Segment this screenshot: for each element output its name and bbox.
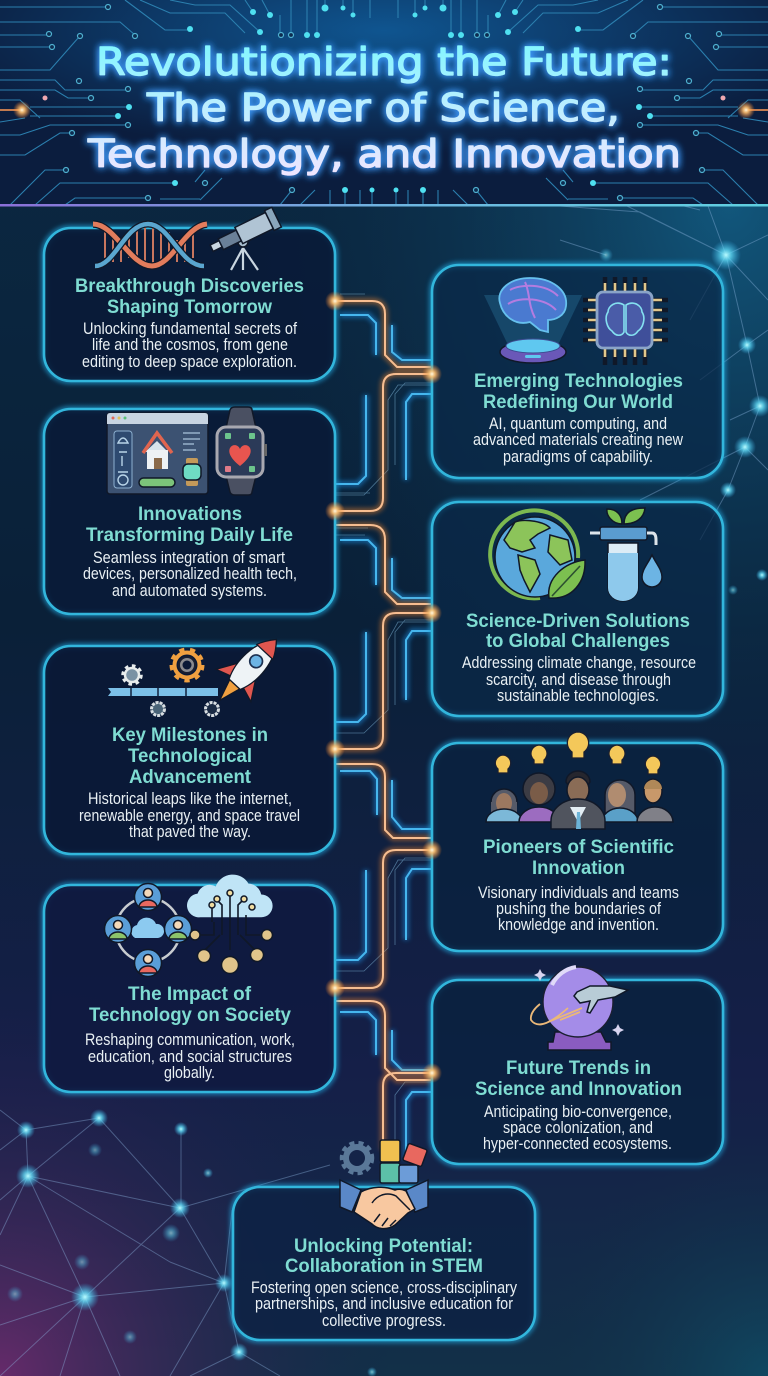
icon: telescope bbox=[207, 207, 281, 270]
panel: key milestones bbox=[44, 623, 335, 854]
body text: devices, personalized health tech, bbox=[83, 564, 297, 583]
heading: Innovation bbox=[532, 857, 625, 879]
heading bbox=[483, 836, 674, 879]
neural network: upper right bbox=[560, 205, 768, 595]
heading bbox=[86, 503, 293, 546]
heading bbox=[475, 1057, 682, 1100]
body text: Unlocking fundamental secrets of bbox=[83, 319, 297, 338]
panel: daily life innovations bbox=[44, 407, 335, 614]
icon: gear and puzzle bbox=[342, 1140, 427, 1183]
heading: Collaboration in STEM bbox=[285, 1255, 483, 1277]
title: Technology, and Innovation bbox=[87, 132, 681, 176]
panel: collaboration in STEM bbox=[233, 1140, 535, 1340]
icon: DNA helix bbox=[93, 224, 207, 266]
heading: Breakthrough Discoveries bbox=[75, 275, 304, 297]
body text: editing to deep space exploration. bbox=[82, 352, 297, 371]
body text bbox=[82, 319, 297, 371]
heading bbox=[75, 275, 304, 318]
heading bbox=[285, 1235, 483, 1277]
body text: renewable energy, and space travel bbox=[79, 806, 300, 825]
heading bbox=[112, 724, 268, 788]
icon: crystal ball with plane bbox=[531, 967, 628, 1050]
body text: sustainable technologies. bbox=[497, 686, 659, 705]
body text: pushing the boundaries of bbox=[496, 899, 661, 918]
heading bbox=[474, 370, 683, 413]
body text bbox=[79, 789, 300, 841]
heading: Science and Innovation bbox=[475, 1078, 682, 1100]
body text: Seamless integration of smart bbox=[93, 548, 285, 567]
panel: breakthrough discoveries bbox=[44, 207, 335, 381]
body text bbox=[478, 883, 679, 934]
heading: Key Milestones in bbox=[112, 724, 268, 746]
icon: AI chip bbox=[583, 277, 668, 365]
body text: AI, quantum computing, and bbox=[489, 414, 667, 433]
heading: Pioneers of Scientific bbox=[483, 836, 674, 858]
heading: to Global Challenges bbox=[486, 630, 670, 652]
connector circuit traces bbox=[335, 294, 432, 1160]
body text: Fostering open science, cross-disciplinary bbox=[251, 1278, 517, 1297]
body text bbox=[483, 1102, 672, 1153]
heading: Emerging Technologies bbox=[474, 370, 683, 392]
body text: Addressing climate change, resource bbox=[462, 653, 696, 672]
icon: handshake bbox=[340, 1180, 428, 1229]
circuit pattern left half bbox=[0, 0, 374, 205]
heading bbox=[89, 983, 291, 1026]
heading: The Impact of bbox=[128, 983, 251, 1005]
panel: global challenges bbox=[432, 502, 723, 716]
heading: Advancement bbox=[129, 766, 251, 788]
neural network: lower left bbox=[0, 1109, 377, 1376]
body text: Anticipating bio-convergence, bbox=[484, 1102, 672, 1121]
icon: timeline with gears bbox=[108, 650, 218, 716]
heading: Future Trends in bbox=[506, 1057, 651, 1079]
icon: cloud tree bbox=[187, 875, 273, 974]
title bbox=[87, 40, 681, 176]
body text: paradigms of capability. bbox=[503, 447, 653, 466]
heading: Technology on Society bbox=[89, 1004, 291, 1026]
title: Revolutionizing the Future: bbox=[96, 40, 672, 84]
heading: Unlocking Potential: bbox=[294, 1235, 473, 1257]
body text bbox=[83, 548, 297, 600]
body text: partnerships, and inclusive education for bbox=[255, 1294, 513, 1313]
connector glow nodes bbox=[325, 291, 442, 1083]
icon: earth and leaf bbox=[490, 510, 585, 598]
body text: space colonization, and bbox=[503, 1118, 653, 1137]
body text: that paved the way. bbox=[129, 822, 251, 841]
body text: collective progress. bbox=[322, 1311, 446, 1330]
body text bbox=[85, 1030, 295, 1082]
body text: advanced materials creating new bbox=[473, 430, 684, 449]
icon: smart watch bbox=[217, 407, 267, 495]
title: The Power of Science, bbox=[146, 86, 620, 130]
body text: education, and social structures bbox=[88, 1047, 292, 1066]
heading: Transforming Daily Life bbox=[86, 524, 293, 546]
heading: Technological bbox=[128, 745, 252, 767]
banner divider line bbox=[0, 204, 768, 206]
body text bbox=[462, 653, 696, 705]
body text: and automated systems. bbox=[112, 581, 267, 600]
body text: hyper-connected ecosystems. bbox=[483, 1134, 672, 1153]
body text: Reshaping communication, work, bbox=[85, 1030, 295, 1049]
circuit pattern right half bbox=[394, 0, 768, 205]
icon: smart home dashboard bbox=[107, 413, 208, 494]
heading bbox=[466, 610, 690, 652]
icon: five light bulbs bbox=[495, 732, 661, 774]
body text: scarcity, and disease through bbox=[486, 670, 671, 689]
panel: technology impact on society bbox=[44, 875, 335, 1092]
body text: knowledge and invention. bbox=[498, 915, 659, 934]
body text bbox=[473, 414, 684, 466]
body text: Historical leaps like the internet, bbox=[88, 789, 292, 808]
icon: water filter tube bbox=[590, 508, 662, 601]
body text: globally. bbox=[164, 1063, 215, 1082]
panel: emerging technologies bbox=[432, 265, 723, 478]
icon: people network bbox=[104, 884, 192, 976]
body text: Visionary individuals and teams bbox=[478, 883, 679, 902]
heading: Shaping Tomorrow bbox=[107, 296, 273, 318]
heading: Science-Driven Solutions bbox=[466, 610, 690, 632]
panel: pioneers bbox=[432, 732, 723, 951]
body text bbox=[251, 1278, 517, 1330]
icon: team of people bbox=[486, 771, 673, 829]
heading: Redefining Our World bbox=[483, 391, 673, 413]
header banner bbox=[0, 0, 768, 205]
body text: life and the cosmos, from gene bbox=[92, 335, 288, 354]
heading: Innovations bbox=[138, 503, 242, 525]
panel: future trends bbox=[432, 967, 723, 1164]
icon: rocket bbox=[202, 623, 294, 717]
icon: holographic brain bbox=[484, 278, 582, 363]
